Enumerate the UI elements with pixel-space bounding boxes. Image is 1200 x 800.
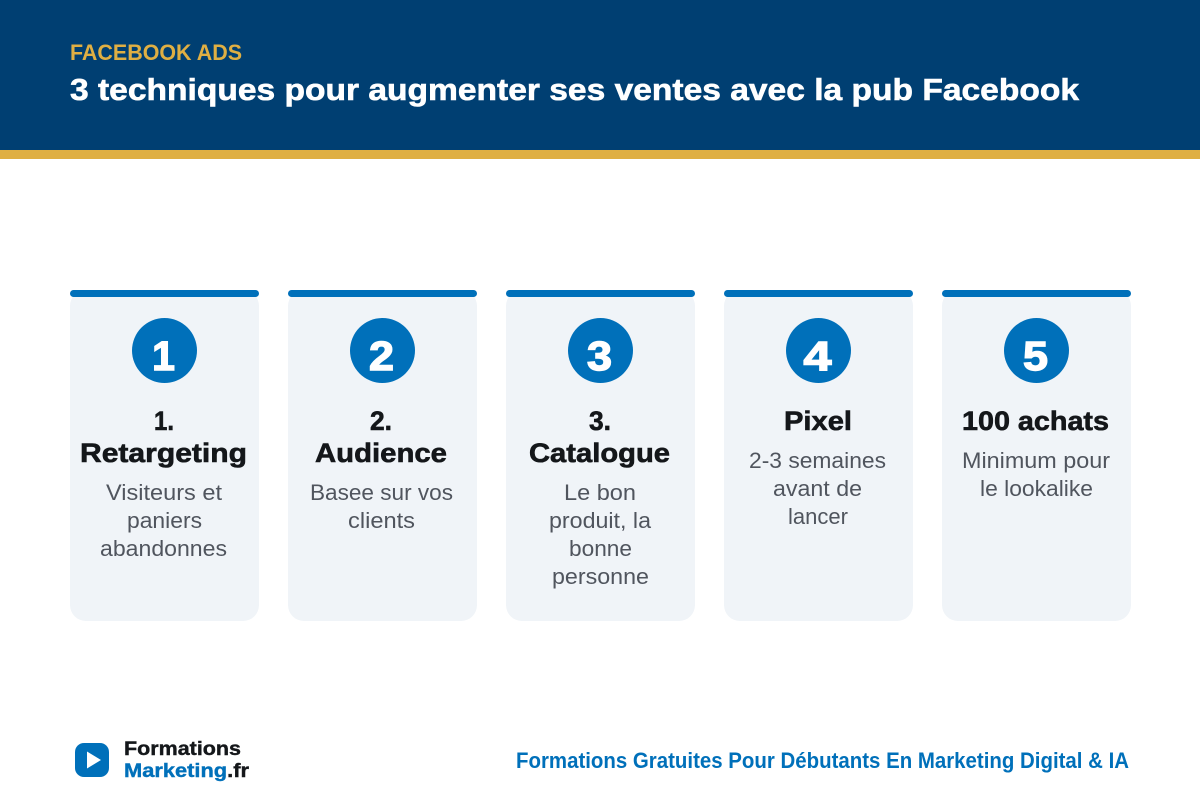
card 2 text: Basee sur vos xyxy=(310,480,453,505)
card 4 text: 2-3 semaines xyxy=(749,448,886,473)
icon: number 5 xyxy=(1004,318,1069,383)
card 2 heading: 2. xyxy=(370,406,392,436)
card 1 heading xyxy=(80,406,247,468)
icon: play button xyxy=(75,743,109,777)
card 5 heading: 100 achats xyxy=(962,406,1109,436)
panel: card 3 catalogue xyxy=(506,290,695,621)
card 5 text: le lookalike xyxy=(980,476,1093,501)
panel: card 4 pixel xyxy=(724,290,913,621)
icon: number 1: 1 xyxy=(152,333,175,379)
card 2 heading: Audience xyxy=(315,438,447,468)
icon: number 4 xyxy=(786,318,851,383)
card 2 text xyxy=(310,480,453,533)
footer logo xyxy=(75,739,250,782)
card 1 heading: Retargeting xyxy=(80,438,247,468)
card 3 heading xyxy=(529,406,670,468)
footer tagline: Formations Gratuites Pour Débutants En Marketing Digital & IA xyxy=(516,748,1129,773)
title: 3 techniques pour augmenter ses ventes avec la pub Facebook xyxy=(70,72,1080,107)
card 4 text: avant de xyxy=(773,476,862,501)
card 1 text: paniers xyxy=(127,508,202,533)
panel: card 5 100 achats xyxy=(942,290,1131,621)
card 3 heading: Catalogue xyxy=(529,438,670,468)
panel: card 2 audience xyxy=(288,290,477,621)
icon: number 2: 2 xyxy=(369,333,394,379)
icon: number 5: 5 xyxy=(1023,333,1048,379)
card 4 heading: Pixel xyxy=(784,406,852,436)
icon: number 1 xyxy=(132,318,197,383)
card 5 text xyxy=(962,448,1110,501)
icon: number 3: 3 xyxy=(587,333,612,379)
card 3 text: produit, la xyxy=(549,508,652,533)
card 1 heading: 1. xyxy=(154,406,174,436)
logo wordmark xyxy=(124,739,250,782)
card 3 text: Le bon xyxy=(564,480,636,505)
card 3 text xyxy=(549,480,652,589)
panel: card 1 retargeting xyxy=(70,290,259,621)
icon: number 4: 4 xyxy=(804,333,832,379)
card 3 text: personne xyxy=(552,564,649,589)
card 1 text: abandonnes xyxy=(100,536,227,561)
header banner xyxy=(0,0,1200,159)
icon: number 2 xyxy=(350,318,415,383)
card 3 heading: 3. xyxy=(589,406,611,436)
card 2 text: clients xyxy=(348,508,415,533)
logo wordmark: Marketing .fr xyxy=(124,761,250,782)
card 3 text: bonne xyxy=(569,536,632,561)
logo wordmark: Formations xyxy=(124,739,241,760)
card 1 text: Visiteurs et xyxy=(106,480,222,505)
card 5 text: Minimum pour xyxy=(962,448,1110,473)
icon: number 3 xyxy=(568,318,633,383)
card 4 text: lancer xyxy=(788,504,848,529)
eyebrow label: FACEBOOK ADS xyxy=(70,40,242,65)
card 1 text xyxy=(100,480,227,561)
card 2 heading xyxy=(315,406,447,468)
card 4 text xyxy=(749,448,886,529)
